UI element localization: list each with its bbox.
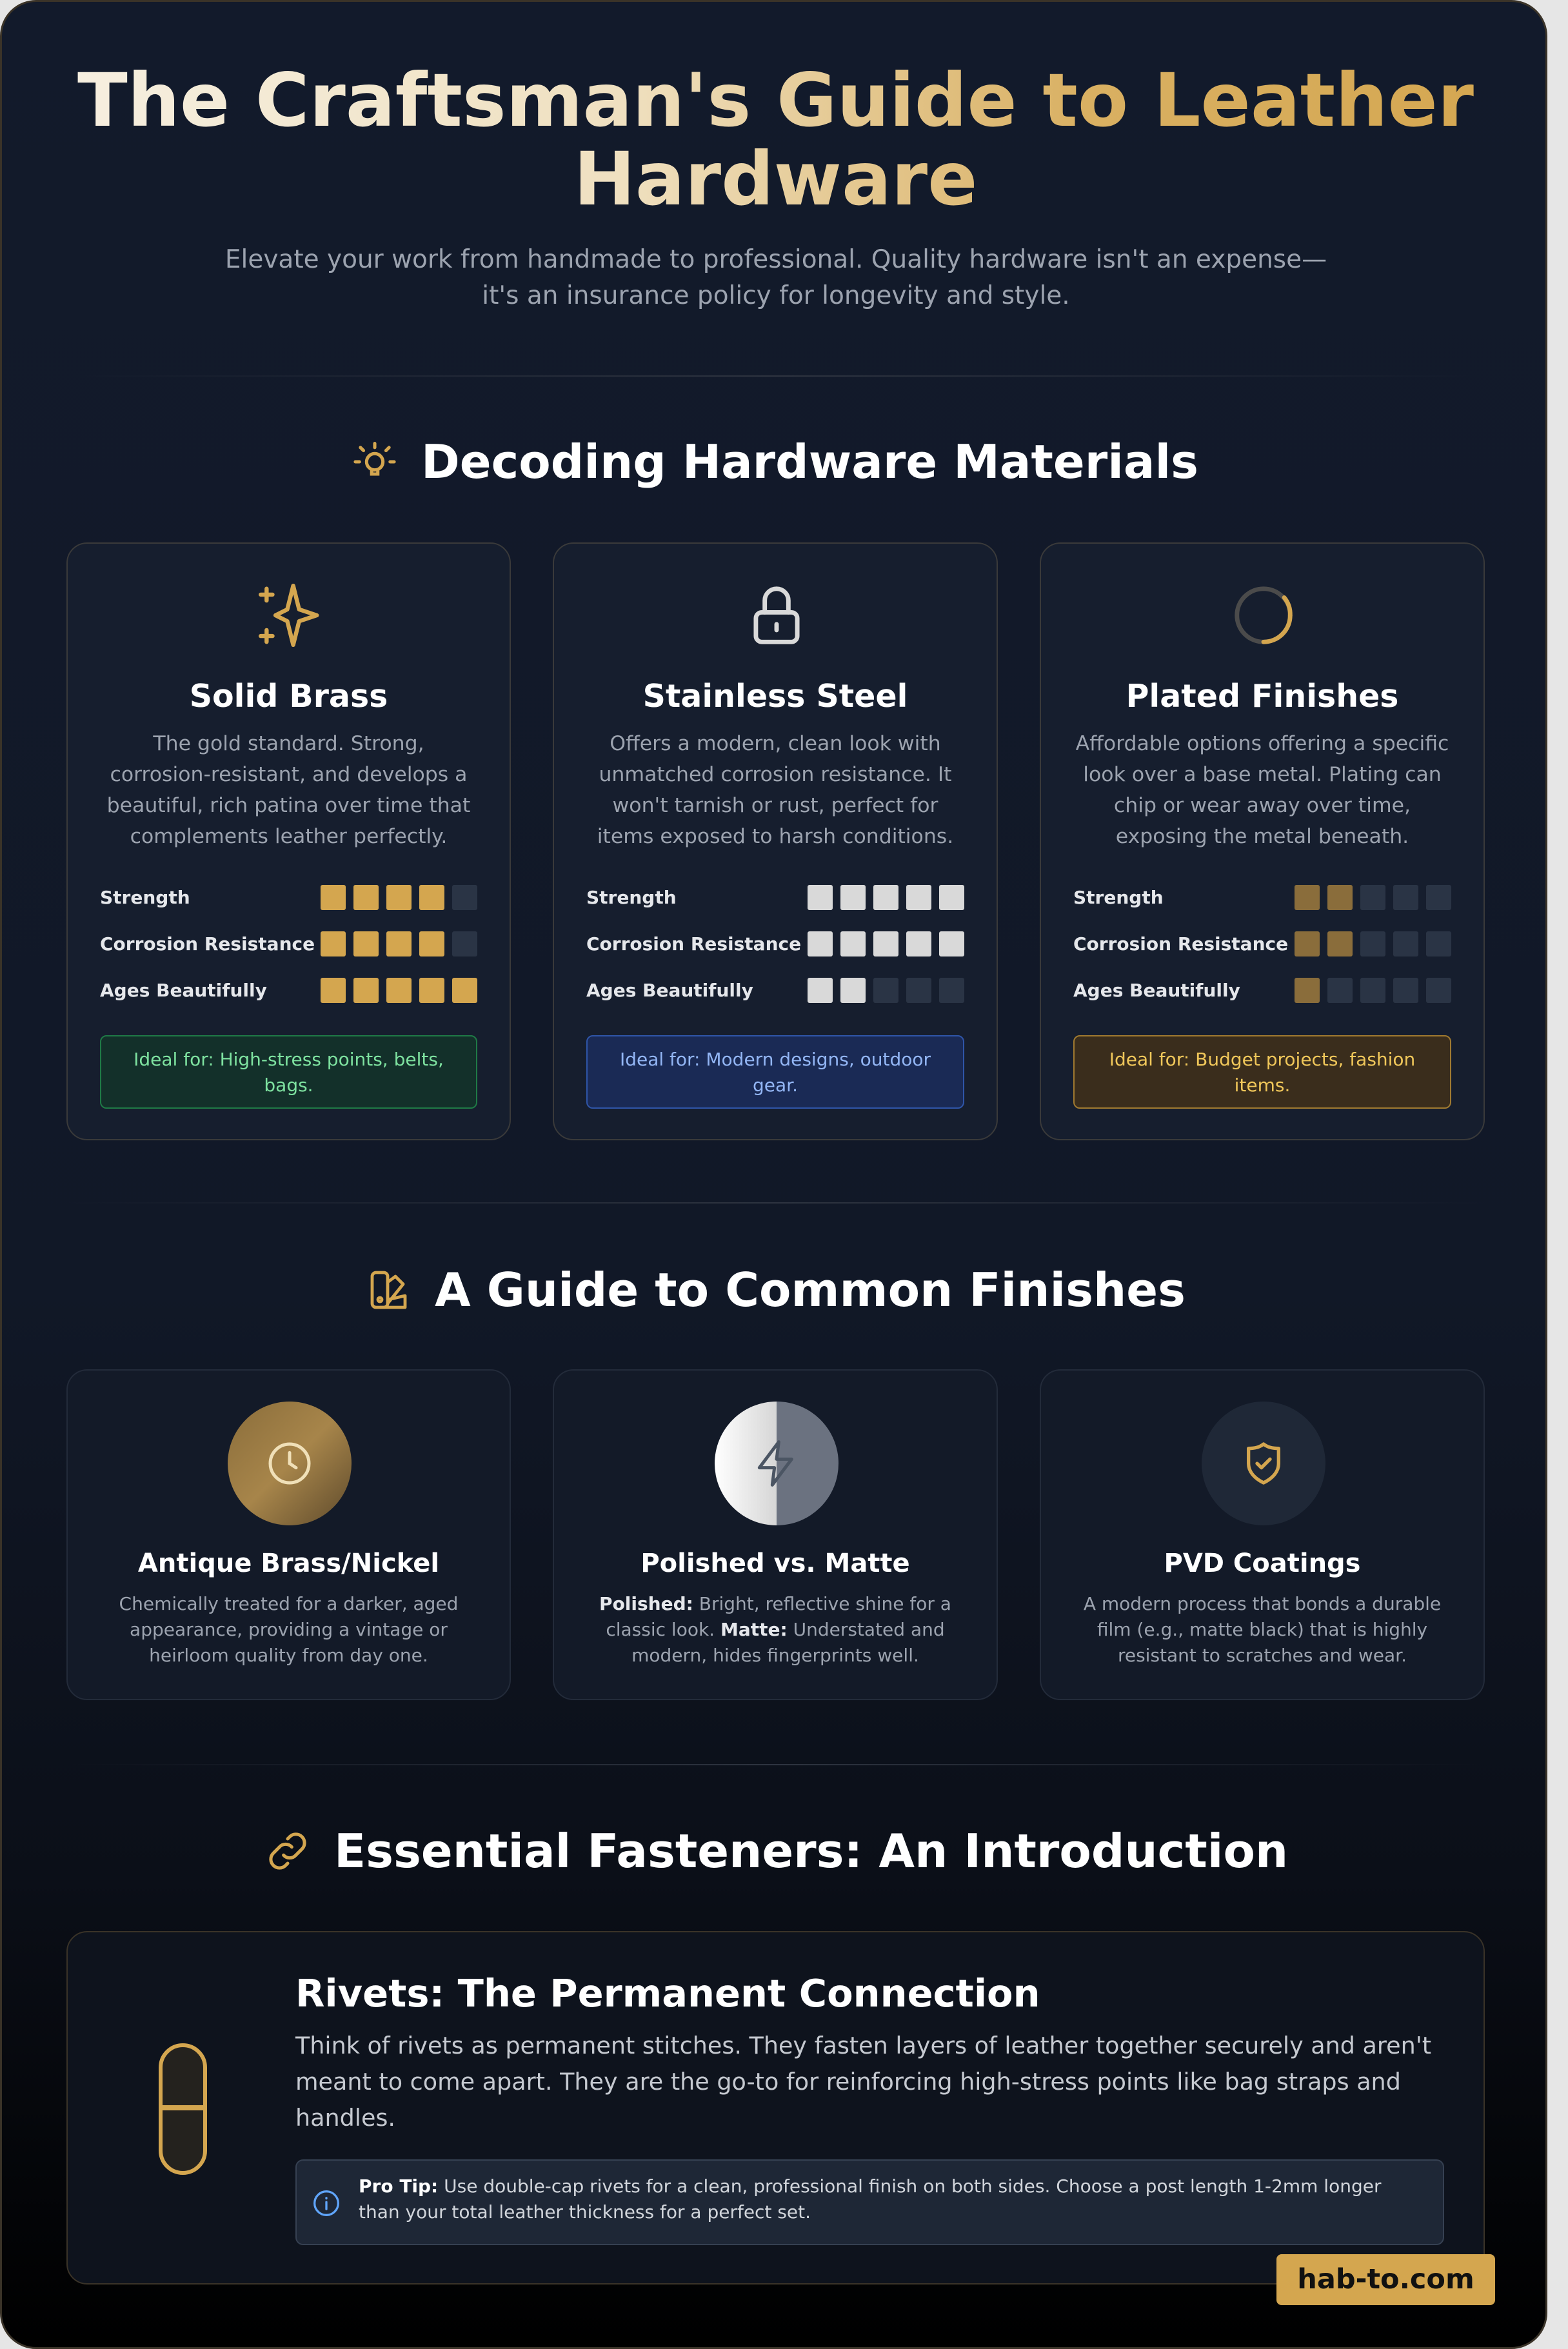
description: classic look. Matte: Understated and — [606, 1619, 945, 1640]
icon: rivet — [159, 2043, 207, 2175]
pro tip — [295, 2159, 1444, 2245]
description: heirloom quality from day one. — [149, 1645, 428, 1666]
card title: Solid Brass — [190, 678, 388, 715]
rating: ages — [100, 978, 477, 1003]
ideal for: Ideal for: Modern designs, outdoor — [620, 1049, 931, 1070]
ideal for: Ideal for: High-stress points, belts, — [134, 1049, 444, 1070]
description: chip or wear away over time, — [1114, 794, 1411, 817]
title: Antique Brass/Nickel — [138, 1549, 439, 1578]
rating: corrosion: Corrosion Resistance — [586, 933, 801, 955]
description: Chemically treated for a darker, aged — [119, 1593, 458, 1614]
description: corrosion-resistant, and develops a — [110, 763, 467, 786]
card title: Plated Finishes — [1126, 678, 1398, 715]
description: items exposed to harsh conditions. — [597, 825, 953, 848]
rating: corrosion — [586, 931, 964, 956]
heading: finishes: A Guide to Common Finishes — [435, 1263, 1186, 1317]
body — [295, 2032, 1431, 2132]
icon: spinner arc — [1235, 586, 1293, 644]
title: PVD Coatings — [1164, 1549, 1360, 1578]
description: A modern process that bonds a durable — [1084, 1593, 1441, 1614]
description: appearance, providing a vintage or — [130, 1619, 448, 1640]
description — [1084, 1593, 1441, 1666]
pro tip: than your total leather thickness for a perfect set. — [359, 2201, 811, 2223]
icon: lock — [753, 586, 800, 644]
rating: ages: Ages Beautifully — [586, 979, 753, 1001]
ideal for — [1073, 1035, 1451, 1109]
description: won't tarnish or rust, perfect for — [613, 794, 938, 817]
rating: strength: Strength — [1073, 886, 1164, 908]
rating: ages: Ages Beautifully — [1073, 979, 1240, 1001]
subtitle: Elevate your work from handmade to professional. Quality hardware isn't an expense— — [225, 245, 1327, 274]
icon: lightbulb — [353, 442, 396, 476]
description: resistant to scratches and wear. — [1118, 1645, 1407, 1666]
icon: swatch — [370, 1271, 406, 1309]
rating: corrosion: Corrosion Resistance — [1073, 933, 1288, 955]
title: Hardware — [574, 136, 977, 222]
rating: corrosion: Corrosion Resistance — [100, 933, 315, 955]
icon: shield circle — [1202, 1402, 1325, 1525]
subtitle: it's an insurance policy for longevity and style. — [482, 281, 1070, 310]
ideal for: items. — [1235, 1075, 1290, 1096]
description — [597, 732, 953, 848]
description — [119, 1593, 458, 1666]
description: exposing the metal beneath. — [1116, 825, 1409, 848]
body: Think of rivets as permanent stitches. They fasten layers of leather together securely and aren't — [295, 2032, 1431, 2059]
rating: strength — [1073, 885, 1451, 910]
ideal for — [100, 1035, 477, 1109]
rating: ages — [1073, 978, 1451, 1003]
panel: rivets — [66, 1931, 1485, 2285]
icon: bolt circle — [715, 1402, 839, 1525]
description — [599, 1593, 951, 1666]
subtitle — [225, 245, 1327, 310]
ideal for: gear. — [753, 1075, 798, 1096]
badge: hab-to.com — [1297, 2263, 1474, 2295]
rating: ages — [586, 978, 964, 1003]
rating: strength — [586, 885, 964, 910]
badge — [1276, 2254, 1495, 2305]
panel: antique — [66, 1369, 511, 1700]
title: The Craftsman's Guide to Leather — [77, 57, 1474, 143]
description: film (e.g., matte black) that is highly — [1097, 1619, 1427, 1640]
pro tip: Pro Tip: Use double-cap rivets for a clean, professional finish on both sides. Choose a post length 1-2mm longer — [359, 2176, 1381, 2197]
icon: sparkles — [259, 584, 319, 647]
ideal for: bags. — [264, 1075, 313, 1096]
panel: stainless steel — [553, 542, 998, 1140]
card title: Stainless Steel — [643, 678, 908, 715]
description: modern, hides fingerprints well. — [631, 1645, 919, 1666]
rating: strength — [100, 885, 477, 910]
icon: clock circle — [228, 1402, 352, 1525]
body: handles. — [295, 2104, 395, 2132]
rating: ages: Ages Beautifully — [100, 979, 267, 1001]
panel: plated finishes — [1040, 542, 1485, 1140]
description: Offers a modern, clean look with — [610, 732, 941, 755]
title: Rivets: The Permanent Connection — [295, 1971, 1040, 2016]
panel: PVD — [1040, 1369, 1485, 1700]
rating: strength: Strength — [100, 886, 190, 908]
description: beautiful, rich patina over time that — [107, 794, 470, 817]
panel: polished vs matte — [553, 1369, 998, 1700]
rating: strength: Strength — [586, 886, 677, 908]
description: The gold standard. Strong, — [153, 732, 424, 755]
icon: link — [269, 1832, 306, 1870]
body: meant to come apart. They are the go-to for reinforcing high-stress points like bag straps and — [295, 2068, 1401, 2096]
panel: solid brass — [66, 542, 511, 1140]
heading: Decoding Hardware Materials: Decoding Hardware Materials — [421, 435, 1198, 489]
description: Affordable options offering a specific — [1076, 732, 1449, 755]
ideal for: Ideal for: Budget projects, fashion — [1109, 1049, 1415, 1070]
icon: info — [313, 2190, 339, 2216]
heading: fasteners: Essential Fasteners: An Introduction — [334, 1824, 1288, 1878]
description — [107, 732, 470, 848]
rating: corrosion — [1073, 931, 1451, 956]
title — [2, 61, 1549, 219]
description: look over a base metal. Plating can — [1083, 763, 1442, 786]
description: Polished: Bright, reflective shine for a — [599, 1593, 951, 1614]
description: unmatched corrosion resistance. It — [599, 763, 952, 786]
description — [1076, 732, 1449, 848]
description: complements leather perfectly. — [130, 825, 447, 848]
title: Polished vs. Matte — [640, 1549, 910, 1578]
rating: corrosion — [100, 931, 477, 956]
ideal for — [586, 1035, 964, 1109]
